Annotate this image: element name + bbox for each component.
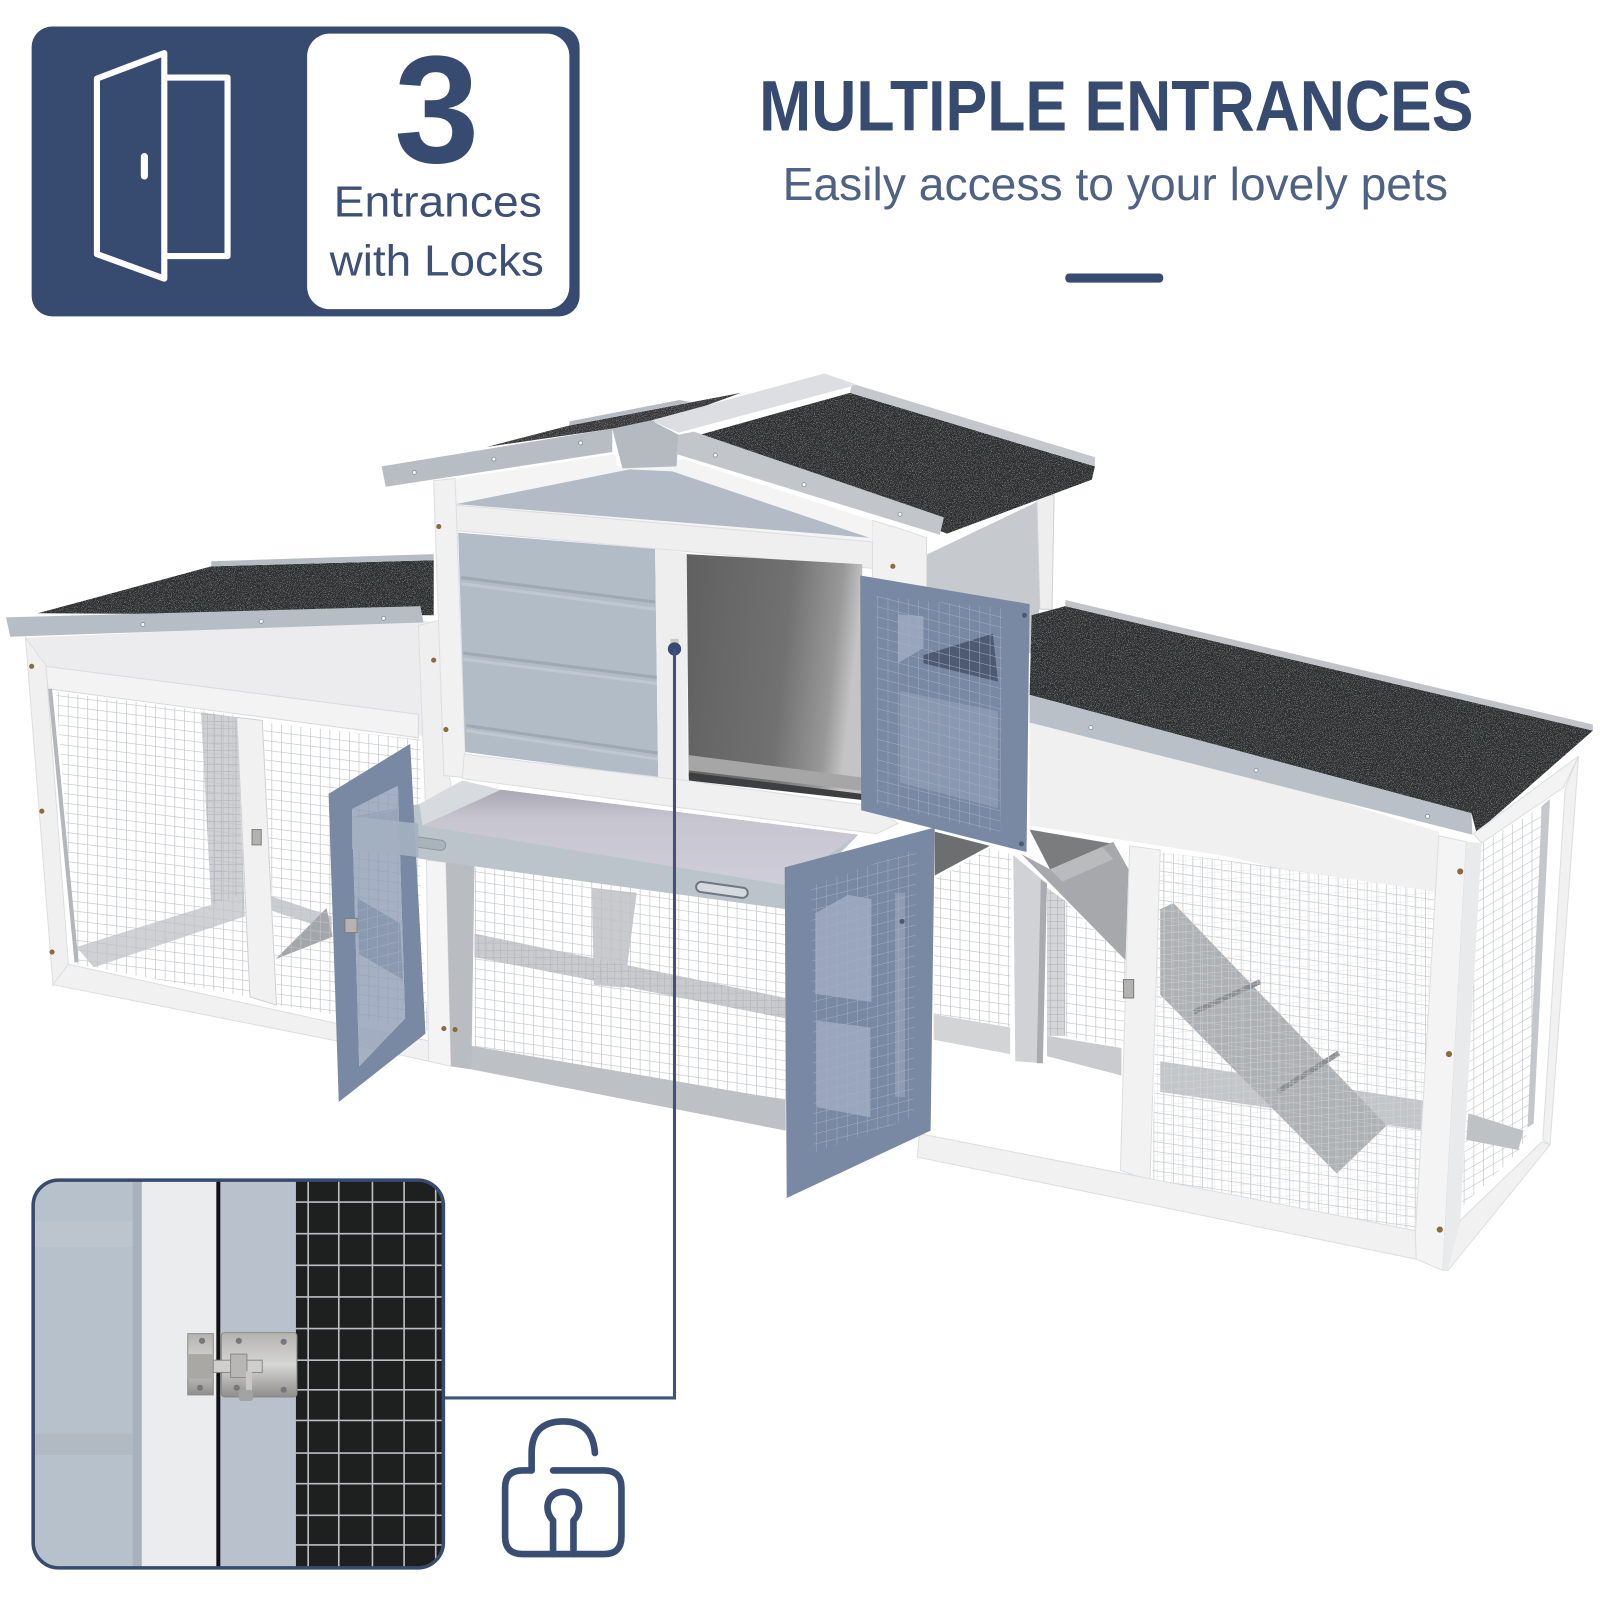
subtitle: Easily access to your lovely pets [783, 158, 1448, 210]
hutch illustration [6, 373, 1593, 1270]
icon: sliding bolt latch [188, 1333, 297, 1401]
badge white card: with Locks [329, 237, 544, 286]
detail panel: door latch close-up [32, 1179, 445, 1568]
title: MULTIPLE ENTRANCES [759, 67, 1473, 147]
mesh [296, 1179, 445, 1568]
lower middle section [427, 860, 796, 1131]
shadow under house [935, 832, 990, 876]
heading accent bar [1065, 273, 1163, 283]
lower right blue door [785, 828, 935, 1198]
upper gable roof [382, 373, 1095, 535]
badge white card: 3 [394, 24, 479, 195]
badge panel: 3 entrances with locks [32, 24, 580, 316]
upper house [434, 454, 1054, 834]
icon: open padlock [505, 1421, 621, 1554]
right run front [917, 600, 1593, 1270]
ramp [1021, 830, 1387, 1173]
drawer tray [354, 781, 858, 909]
icon: open door [97, 53, 228, 279]
left run [6, 554, 451, 1061]
latches and screws [29, 441, 1463, 1233]
callout leader line with anchor dot [445, 642, 681, 1398]
upper right blue door [860, 576, 1030, 852]
right run back [934, 799, 1550, 1234]
tray handles [401, 835, 748, 899]
badge white card: Entrances [334, 177, 542, 226]
badge white card [307, 24, 569, 309]
left blue door [329, 744, 426, 1102]
